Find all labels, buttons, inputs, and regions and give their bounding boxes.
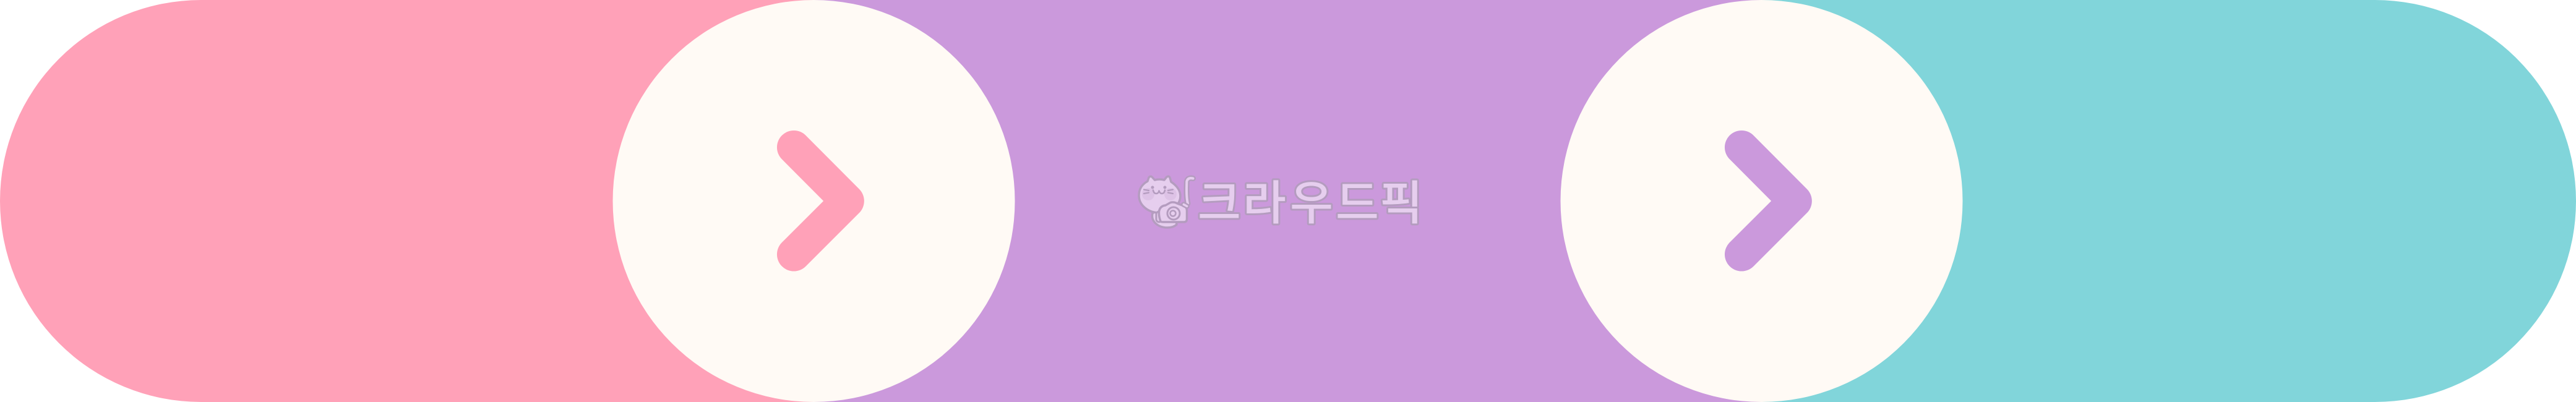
camera tab <box>1181 202 1190 208</box>
cat body <box>1153 210 1177 228</box>
icon: cat with camera <box>1139 176 1193 228</box>
cat eyes <box>1151 186 1154 189</box>
camera grip <box>1156 212 1162 222</box>
cat head <box>1139 176 1180 213</box>
cat whiskers <box>1144 189 1173 194</box>
circle button: first arrow <box>612 0 1015 402</box>
logo wordmark: 크라우드픽 <box>1198 177 1423 230</box>
panel: purple middle segment <box>814 0 1762 402</box>
icon: pink chevron arrow <box>794 147 848 254</box>
watermark logo <box>1139 176 1423 230</box>
cat cheeks <box>1142 188 1154 200</box>
circle button: second arrow <box>1560 0 1962 402</box>
camera lens <box>1167 207 1180 220</box>
panel: pink left segment <box>0 0 814 402</box>
camera body <box>1159 202 1187 222</box>
camera strap <box>1187 178 1193 203</box>
icon: purple chevron arrow <box>1741 147 1795 254</box>
panel: teal right segment <box>1761 0 2576 402</box>
cat mouth <box>1153 190 1165 194</box>
